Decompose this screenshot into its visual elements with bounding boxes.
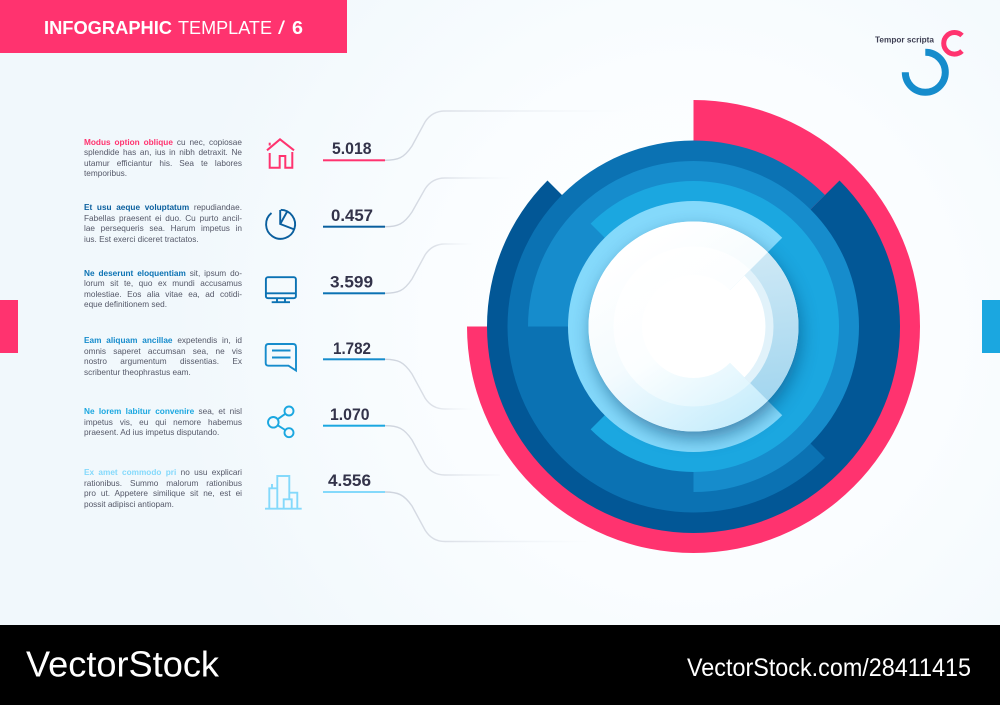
logo blue arc <box>905 52 945 92</box>
dark blue sector <box>487 180 900 533</box>
icon: house <box>267 139 294 168</box>
medium blue sector <box>507 140 825 512</box>
title text: / <box>278 17 286 38</box>
value underline 6 <box>323 491 385 493</box>
text block 1: temporibus. <box>84 169 127 178</box>
icon: share nodes <box>268 406 294 437</box>
footer url: VectorStock.com/28411415 <box>687 654 971 682</box>
text block 4: scribentur theophrastus eam. <box>84 368 191 377</box>
connector 4 <box>323 358 475 409</box>
value 1.782: 1.782 <box>333 340 371 358</box>
text block 6: pro ut. Appetere similique sit ne, est ei <box>84 489 242 498</box>
text block 2 <box>84 203 242 244</box>
central disc <box>588 222 799 432</box>
value underline 4 <box>323 358 385 360</box>
text block 5: Ne lorem labitur convenire sea, et nisl <box>84 407 242 416</box>
text block 4: Eam aliquam ancillae expetendis in, id <box>84 336 242 345</box>
value 1.070: 1.070 <box>330 406 370 424</box>
text block 5 <box>84 407 242 437</box>
value numbers <box>328 140 373 490</box>
icon: city buildings <box>265 476 302 509</box>
connector 3 <box>323 244 475 294</box>
blue sector <box>528 161 859 492</box>
text block 1: splendide has an, ius in nibh detraxit. Ne <box>84 148 242 157</box>
text block 6: Ex amet commodo pri no usu explicari <box>84 468 242 477</box>
title text <box>44 17 303 38</box>
text block 6: rationibus. Summo malorum rationibus <box>84 479 242 488</box>
value 0.457: 0.457 <box>331 207 373 225</box>
text block 1 <box>84 138 242 178</box>
logo: Tempor scripta <box>875 36 934 44</box>
text block 3: lorum sit te, quo ex mundi accusamus <box>84 279 242 288</box>
logo <box>875 33 962 92</box>
title text: TEMPLATE <box>178 17 272 38</box>
logo pink arc <box>944 33 962 54</box>
text block 5: impetus vis, eu qui nemore habemus <box>84 418 242 427</box>
title text: 6 <box>292 17 303 38</box>
text block 6: possit adipisci antiopam. <box>84 500 174 509</box>
text block 4: nostro argumentum dissentias. Ex <box>84 357 242 366</box>
value underline 3 <box>323 292 385 294</box>
value underline 5 <box>323 425 385 427</box>
right side tab <box>982 300 1000 353</box>
text block 3: molestiae. Eos alia vitae ea, ad cotidi- <box>84 290 242 299</box>
text block 1: utamur efficiantur his. Sea te labores <box>84 158 242 168</box>
icon: monitor <box>266 277 296 302</box>
left side tab <box>0 300 18 353</box>
text block 2: ius. Est exerci diceret tractatos. <box>84 234 199 244</box>
sky blue sector <box>591 181 839 472</box>
icon: pie chart <box>266 210 295 239</box>
connector 2 <box>323 178 515 228</box>
text block 4: omnis saperet accumsan sea, ne vis <box>84 347 242 356</box>
value 4.556: 4.556 <box>328 472 371 490</box>
text block 1: Modus option oblique cu nec, copiosae <box>84 138 242 146</box>
footer brand: VectorStock <box>26 644 220 684</box>
title text: INFOGRAPHIC <box>44 17 172 38</box>
text block 3 <box>84 269 242 309</box>
disc shadow <box>592 230 800 438</box>
text block 3: Ne deserunt eloquentiam sit, ipsum do- <box>84 269 242 278</box>
text block 2: lae persequeris sea. Harum impetus in <box>84 224 242 233</box>
value 5.018: 5.018 <box>332 140 372 158</box>
title banner <box>0 0 347 53</box>
value underline 1 <box>323 159 385 161</box>
text block 2: Fabellas praesent ei duo. Cu purto ancil- <box>84 214 242 222</box>
text block 2: Et usu aeque voluptatum repudiandae. <box>84 203 242 212</box>
connector 6 <box>323 491 595 542</box>
pink sector <box>467 100 920 553</box>
radial chart <box>467 100 920 553</box>
connector 5 <box>323 425 500 475</box>
value underline 2 <box>323 226 385 228</box>
text block 4 <box>84 336 242 377</box>
text block 5: praesent. Ad ius impetus disputando. <box>84 428 219 437</box>
text block 6 <box>84 468 242 509</box>
text block 3: eque definitionem sed. <box>84 300 167 309</box>
footer bar <box>0 625 1000 705</box>
value 3.599: 3.599 <box>330 274 373 292</box>
connector 1 <box>323 111 630 161</box>
pale blue sector <box>568 201 782 452</box>
icon: chat bubble <box>266 344 296 370</box>
